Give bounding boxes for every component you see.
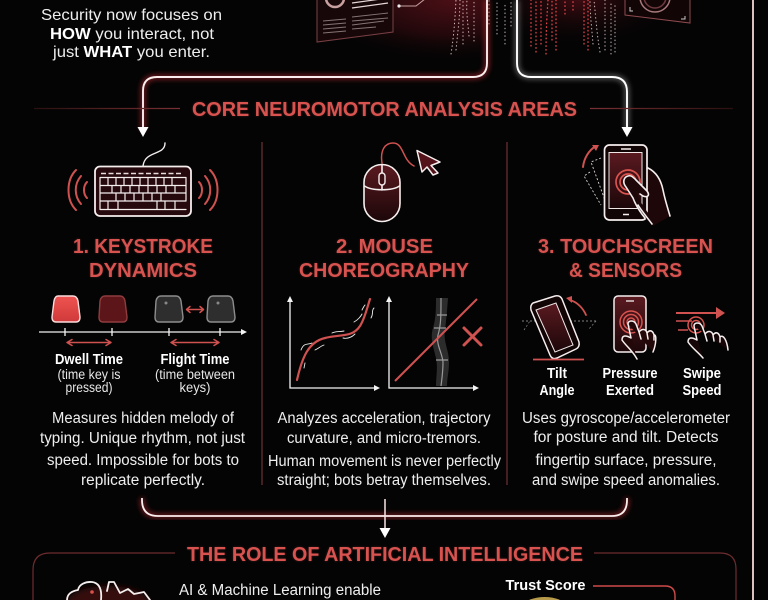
hero art glow bbox=[310, 0, 668, 76]
icon: pressure exerted: Exerted bbox=[606, 382, 654, 399]
text: touchscreen description: for posture and tilt. Detects bbox=[534, 429, 719, 446]
text: mouse description bbox=[268, 410, 501, 489]
diagram: dwell and flight timeline: Dwell Time bbox=[55, 351, 123, 368]
panel outline bbox=[33, 553, 736, 600]
connector: hero to touchscreen bbox=[517, 0, 632, 137]
icon: swipe speed bbox=[676, 307, 728, 399]
heading: touchscreen and sensors bbox=[538, 235, 713, 282]
text: mouse description: Analyzes acceleration, trajectory bbox=[278, 410, 491, 427]
icon: brain and gear bbox=[66, 582, 150, 600]
heading: role of AI: THE ROLE OF ARTIFICIAL INTELLIGENCE bbox=[187, 543, 583, 566]
panel: keystroke dynamics bbox=[39, 143, 247, 489]
hero: right scan card bbox=[625, 0, 690, 23]
trust score label and leader bbox=[506, 577, 675, 600]
icon: mouse and cursor bbox=[364, 143, 440, 222]
heading: touchscreen and sensors: 3. TOUCHSCREEN bbox=[538, 235, 713, 258]
text: touchscreen description bbox=[522, 410, 730, 489]
heading: keystroke dynamics: 1. KEYSTROKE bbox=[73, 235, 213, 258]
heading: mouse choreography: CHOREOGRAPHY bbox=[299, 259, 469, 282]
icon: tilt angle: Angle bbox=[540, 382, 574, 399]
heading: mouse choreography: 2. MOUSE bbox=[336, 235, 433, 258]
connector: hero to keystroke bbox=[138, 0, 487, 137]
diagram: dwell and flight timeline: Flight Time bbox=[160, 351, 230, 368]
icon: keyboard with sound waves bbox=[68, 143, 218, 216]
intro text bbox=[41, 7, 222, 61]
heading: keystroke dynamics bbox=[73, 235, 213, 282]
text: keystroke description bbox=[40, 410, 246, 489]
diagram: dwell and flight timeline: pressed) bbox=[66, 380, 112, 395]
text: touchscreen description: fingertip surface, pressure, bbox=[536, 452, 716, 469]
text: keystroke description: typing. Unique rhythm, not just bbox=[40, 430, 246, 447]
trust score gauge bbox=[530, 598, 559, 600]
diagram: dwell and flight timeline: (time key is bbox=[58, 367, 121, 382]
right frame line bbox=[751, 0, 755, 600]
hero: left data card bbox=[317, 0, 425, 42]
intro text: just WHAT you enter. bbox=[52, 44, 210, 61]
icon: swipe speed: Swipe bbox=[683, 365, 721, 382]
section heading: core neuromotor analysis areas: CORE NEUROMOTOR ANALYSIS AREAS bbox=[192, 98, 577, 121]
trust score label and leader: Trust Score bbox=[506, 577, 586, 594]
chart: bot straight trajectory bbox=[386, 296, 481, 391]
text: mouse description: curvature, and micro-tremors. bbox=[287, 430, 481, 447]
text: keystroke description: replicate perfectly. bbox=[81, 472, 205, 489]
intro text: Security now focuses on bbox=[41, 7, 222, 24]
intro text: HOW you interact, not bbox=[50, 26, 215, 43]
text: keystroke description: Measures hidden melody of bbox=[52, 410, 235, 427]
diagram: dwell and flight timeline: (time between bbox=[155, 367, 235, 382]
text: keystroke description: speed. Impossible for bots to bbox=[47, 452, 239, 469]
chart: human mouse trajectory bbox=[287, 296, 380, 391]
icon: tilt angle: Tilt bbox=[547, 365, 567, 382]
text: mouse description: Human movement is never perfectly bbox=[268, 453, 501, 470]
icon: phone with touch and tilt bbox=[583, 145, 670, 226]
text: touchscreen description: and swipe speed anomalies. bbox=[532, 472, 720, 489]
icon: pressure exerted: Pressure bbox=[602, 365, 658, 382]
text: mouse description: straight; bots betray themselves. bbox=[277, 472, 491, 489]
column dividers bbox=[262, 142, 507, 485]
diagram: dwell and flight timeline bbox=[39, 296, 247, 395]
panel: touchscreen and sensors bbox=[522, 145, 730, 489]
icon: tilt angle bbox=[522, 296, 596, 399]
text: AI description: AI & Machine Learning enable bbox=[179, 582, 381, 599]
panel: mouse choreography bbox=[268, 143, 501, 489]
hero: particle streams bbox=[451, 0, 615, 54]
heading: mouse choreography bbox=[299, 235, 469, 282]
diagram: dwell and flight timeline: keys) bbox=[180, 380, 210, 395]
heading: keystroke dynamics: DYNAMICS bbox=[89, 259, 197, 282]
text: touchscreen description: Uses gyroscope/accelerometer bbox=[522, 410, 730, 427]
panel: role of artificial intelligence bbox=[33, 543, 736, 600]
heading: touchscreen and sensors: & SENSORS bbox=[569, 259, 682, 282]
connector: bracket into AI section bbox=[142, 498, 627, 538]
icon: swipe speed: Speed bbox=[682, 382, 722, 399]
icon: pressure exerted bbox=[602, 296, 658, 399]
